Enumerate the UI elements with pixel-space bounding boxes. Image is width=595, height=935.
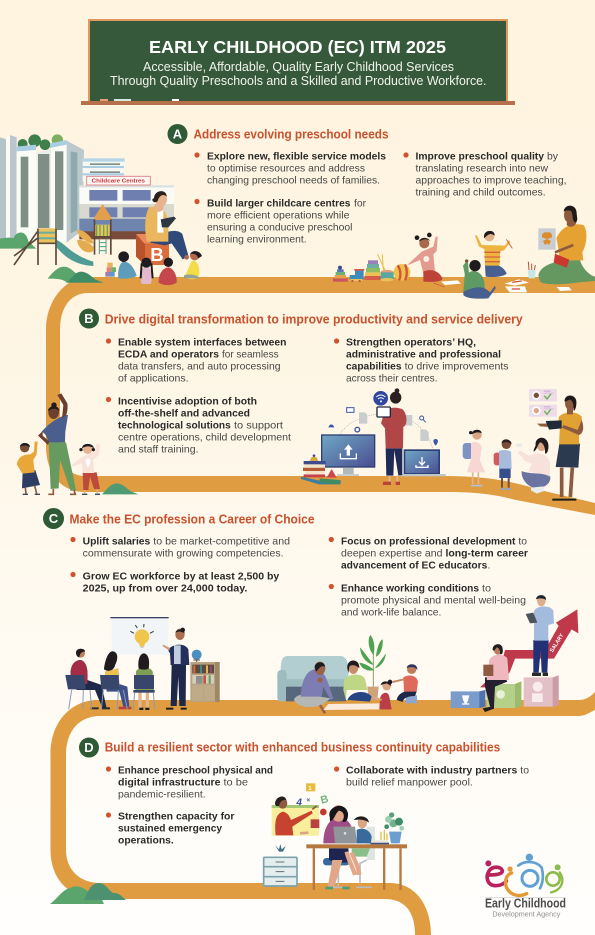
- board game mat: [323, 703, 382, 710]
- bullets B: capabilities: [346, 362, 402, 372]
- boy in green from back: [463, 259, 496, 299]
- desktop monitor: [321, 434, 375, 476]
- illustration: training class with presenter: [65, 617, 220, 710]
- illustration: family on sofa, salary arrow and podium: [277, 595, 578, 713]
- mother on floor: [343, 660, 372, 702]
- logo text: Early Childhood: [485, 896, 566, 910]
- documents: [359, 412, 429, 441]
- crouching woman with thermometer: [516, 438, 550, 494]
- plant on cabinet: [275, 844, 286, 852]
- floating letters and apple: 4: [295, 797, 302, 808]
- boy in yellow: [17, 442, 40, 494]
- heading C: Make the EC profession a Career of Choice: [70, 512, 314, 526]
- laptop: [400, 449, 446, 476]
- bullets C: promote physical and mental well-being: [341, 596, 526, 606]
- heading A: Address evolving preschool needs: [194, 126, 388, 142]
- chair: [323, 827, 375, 887]
- bullets B: off-the-shelf and advanced: [118, 408, 250, 420]
- bullets D: to be: [224, 778, 248, 788]
- slide and climbing frame: [14, 228, 93, 266]
- drum: [378, 254, 394, 281]
- bullets C: .: [488, 560, 490, 572]
- bullets D: Collaborate with industry partners: [346, 766, 518, 776]
- bullets A: translating research into new: [416, 164, 549, 174]
- bullets D: [106, 766, 529, 846]
- approval cards: [529, 389, 557, 417]
- bullets D: Enhance preschool physical and: [118, 766, 273, 776]
- badge A: A: [173, 126, 183, 142]
- path: winding road lower: [50, 692, 595, 935]
- bullets B: and staff training.: [118, 444, 198, 456]
- bullets A: Explore new, flexible service models: [207, 152, 386, 162]
- tower blocks: [0, 135, 84, 243]
- teacher seated: [145, 191, 189, 260]
- bullets A: Build larger childcare centres: [207, 198, 351, 210]
- bullets A: Improve preschool quality: [416, 152, 544, 162]
- boy striped shirt: [475, 231, 512, 277]
- bullets A: ensuring a conducive preschool: [207, 222, 352, 234]
- bullets D: Strengthen capacity for: [118, 812, 235, 822]
- bullets B: [106, 338, 509, 456]
- bullets A: [194, 152, 566, 246]
- floating letters and apple: 1: [308, 786, 311, 792]
- boy with backpack: [494, 439, 512, 489]
- bullets C: deepen expertise and: [341, 548, 443, 560]
- bullets A: for: [354, 198, 367, 210]
- bullets C: Focus on professional development: [341, 536, 516, 548]
- bullets C: to: [518, 536, 527, 548]
- subtitle line 1: Accessible, Affordable, Quality Early Childhood Services: [143, 60, 454, 74]
- girl: [372, 680, 392, 709]
- bullets D: build relief manpower pool.: [346, 778, 473, 788]
- laptop: [333, 827, 357, 843]
- title board: [81, 20, 515, 105]
- bullets B: of applications.: [118, 374, 189, 384]
- desk: [306, 844, 407, 890]
- ball: [394, 264, 410, 281]
- illustration: toys, children and teacher on road: [333, 206, 595, 299]
- bullets C: [70, 536, 528, 618]
- illustration: bushes on road: [50, 883, 126, 904]
- bullets D: pandemic-resilient.: [118, 790, 206, 800]
- teacher kneeling holding butterfly picture: [538, 206, 595, 284]
- ring stack toy: [333, 266, 348, 282]
- bullets C: commensurate with growing competencies.: [83, 548, 284, 560]
- floating letters and apple: ×: [307, 798, 311, 804]
- bullets A: approaches to improve teaching,: [416, 176, 566, 186]
- bullets C: to be market-competitive and: [153, 536, 290, 548]
- bullets B: for seamless: [222, 350, 279, 360]
- title: EARLY CHILDHOOD (EC) ITM 2025: [149, 37, 446, 57]
- globe and bookcase: [190, 650, 220, 702]
- bullets B: administrative and professional: [346, 350, 501, 360]
- illustration: digital transformation, screens and people: [301, 388, 583, 500]
- floating letters and apple: [295, 783, 330, 815]
- seated man: [71, 649, 110, 709]
- sign: Childcare Centres: Childcare Centres: [92, 179, 145, 185]
- seated woman with long hair: [104, 651, 131, 709]
- sofa: [277, 656, 348, 702]
- subtitle line 2: Through Quality Preschools and a Skilled and Productive Workforce.: [110, 74, 486, 88]
- girl with heart: [72, 444, 100, 494]
- bullets B: centre operations, child development: [118, 432, 291, 444]
- potted plant: [384, 812, 404, 843]
- online lesson screen: [272, 796, 319, 836]
- child: [347, 816, 372, 875]
- badge D: D: [84, 740, 94, 755]
- heading B: Drive digital transformation to improve productivity and service delivery: [105, 312, 523, 326]
- bullets B: Strengthen operators’ HQ,: [346, 338, 476, 348]
- children seated: [118, 251, 202, 285]
- bullets B: across their centres.: [346, 374, 438, 384]
- back building: [83, 158, 125, 182]
- drawing papers: [433, 279, 572, 292]
- bullets B: data transfers, and auto processing: [118, 362, 281, 372]
- woman stretching: [38, 393, 76, 494]
- illustration: woman and two children stretching: [17, 393, 138, 494]
- floating letters and apple: B: [319, 793, 330, 807]
- bullets A: more efficient operations while: [207, 210, 350, 222]
- bullets B: Enable system interfaces between: [118, 338, 286, 348]
- logo tagline: Development Agency: [492, 911, 561, 918]
- woman standing with tablet: [537, 396, 583, 500]
- bullets D: operations.: [118, 836, 174, 846]
- bullets D: digital infrastructure: [118, 778, 221, 788]
- bullets A: by: [547, 152, 559, 162]
- bullets C: advancement of EC educators: [341, 560, 488, 572]
- bullets C: Enhance working conditions: [341, 584, 479, 594]
- logo mark: [485, 854, 566, 898]
- block B seat: B: [150, 244, 164, 265]
- pencil cup: [528, 262, 536, 278]
- stationery and books: [371, 830, 389, 844]
- bullets A: changing preschool needs of families.: [207, 176, 380, 186]
- toy train: [350, 269, 364, 282]
- bullets B: to drive improvements: [405, 362, 509, 372]
- bullets B: ECDA and operators: [118, 350, 219, 360]
- bush left: [0, 232, 37, 249]
- badge C: [43, 508, 64, 529]
- seated woman from behind: [135, 653, 154, 710]
- bushes front: [48, 267, 103, 283]
- salary arrow: SALARY: [549, 633, 565, 654]
- bullets C: and work-life balance.: [341, 608, 441, 618]
- bush: [102, 483, 138, 494]
- dotted data arc: [340, 414, 432, 448]
- sign: Childcare Centres: [87, 176, 150, 185]
- plant: [359, 635, 386, 700]
- toy blocks: [105, 263, 116, 277]
- woman with tablet: [377, 388, 406, 485]
- badge C: C: [49, 511, 59, 526]
- girl with ball: [408, 233, 442, 282]
- badge B: B: [84, 311, 94, 326]
- bullets C: Grow EC workforce by at least 2,500 by: [83, 572, 280, 582]
- bullets C: long-term career: [446, 548, 528, 560]
- bullets B: technological solutions: [118, 420, 231, 432]
- mother: [323, 805, 355, 889]
- bullets C: to: [482, 584, 491, 594]
- panel: section C: [43, 508, 528, 618]
- salary arrow: [480, 609, 578, 687]
- girl with backpack: [463, 430, 485, 486]
- childcare centre building: [79, 185, 174, 239]
- bullets B: Incentivise adoption of both: [118, 396, 257, 408]
- badge D: [79, 738, 99, 758]
- boy: [393, 664, 418, 703]
- chairs: [65, 675, 155, 709]
- panel: section D: [79, 738, 529, 846]
- woman seated on box: [483, 644, 509, 712]
- man standing on box with clipboard: [526, 595, 554, 676]
- cabinet: [264, 857, 297, 886]
- books and toy: [301, 454, 341, 484]
- floating icons: [328, 391, 438, 446]
- bullets B: to support: [234, 420, 283, 432]
- playground tower: [77, 204, 112, 255]
- block B seat: [136, 234, 169, 265]
- bullets D: to: [520, 766, 529, 776]
- badge A: [168, 124, 188, 144]
- bullets C: Uplift salaries: [83, 536, 151, 548]
- bullets A: training and child outcomes.: [416, 188, 546, 198]
- father on floor: [294, 662, 333, 713]
- projector screen with light bulb: [110, 617, 169, 655]
- path: winding road upper: [46, 277, 595, 515]
- illustration: home learning, parent and child at desk: [264, 783, 407, 890]
- bullets A: to optimise resources and address: [207, 164, 365, 174]
- trees on roof: [18, 134, 63, 150]
- logo: ECDA: [485, 854, 566, 918]
- podium boxes: [451, 675, 559, 708]
- bullets C: 2025, up from over 24,000 today.: [83, 584, 248, 594]
- panel: section A: [168, 124, 566, 246]
- badge B: [79, 308, 99, 328]
- bullets A: learning environment.: [207, 234, 307, 246]
- illustration: buildings, childcare centre and teacher with children: [0, 134, 202, 285]
- stacking tower: [364, 260, 381, 280]
- bullets D: sustained emergency: [118, 824, 222, 834]
- presenter: [162, 628, 189, 710]
- panel: section B: [79, 308, 523, 456]
- heading D: Build a resilient sector with enhanced business continuity capabilities: [105, 740, 500, 754]
